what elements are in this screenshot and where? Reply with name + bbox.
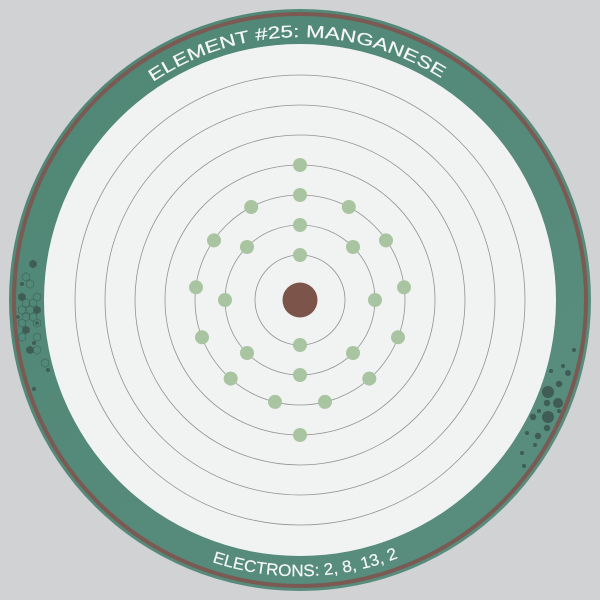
texture: dark hexagons and dots left	[16, 260, 50, 391]
electrons: shell 1 (2)	[293, 248, 307, 352]
title: ELEMENT #25: MANGANESE	[148, 25, 446, 82]
texture: hexagon cluster left	[18, 273, 49, 367]
electrons: shell 4 (2)	[293, 158, 307, 442]
inner light disc	[44, 44, 556, 556]
texture: dark dots right	[520, 348, 576, 468]
electron configuration label: ELECTRONS: 2, 8, 13, 2	[213, 548, 398, 576]
nucleus	[282, 282, 318, 318]
electrons: shell 3 (13)	[189, 188, 411, 409]
electrons: shell 2 (8)	[218, 218, 382, 382]
electron shell orbits	[75, 75, 525, 525]
